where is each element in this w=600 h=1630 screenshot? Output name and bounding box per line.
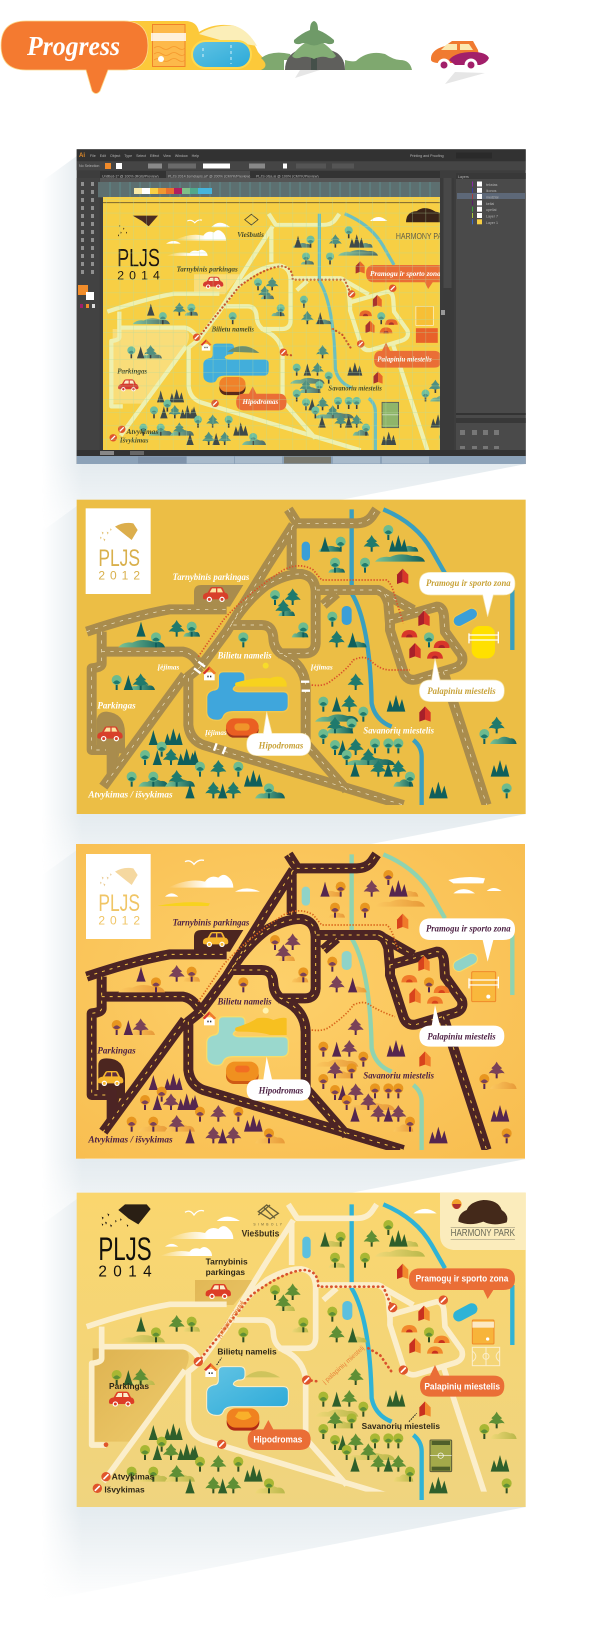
pond [302,887,479,973]
stadium [226,1062,259,1084]
trees [112,525,517,798]
menu bar: File Edit Object Type Select Effect View Window Help [90,154,199,158]
callout: sports [419,918,515,962]
camp [397,569,450,722]
lake [207,663,288,720]
map labels [117,231,441,445]
colour swatches [134,188,212,194]
map labels: Hipodromas [242,398,278,406]
callout: camp [419,1005,504,1047]
callout: camp [420,1365,504,1397]
map labels: Tarnybinis parkingas [173,572,250,582]
status bar [77,450,526,456]
icon: sports court [151,24,186,66]
cars [97,587,228,741]
callout: hippodrome: Hipodromas [258,1085,304,1095]
logo: PLJS 2012: PLJS [98,890,140,917]
house [204,1363,217,1377]
layers panel: medžiai [486,196,499,200]
roads [107,214,427,450]
map labels: Tarnybinis parkingas [173,918,250,928]
sports court [472,1320,494,1344]
tools panel [77,178,100,450]
logo: PLJS 2012: 2 0 1 2 [98,568,140,582]
menu bar: Printing and Proofing [410,154,444,158]
map labels: Savanoriu miestelis [363,1070,434,1080]
pond [302,542,479,628]
sports court [416,306,438,343]
harmony park logo [396,208,440,239]
callout: hippodrome: Hipodromas [253,1435,302,1445]
trees [127,226,451,445]
knot icon [245,214,258,225]
map labels: Tarnybinis parkingas [177,266,238,274]
icon: hills [261,53,412,70]
logo: PLJS 2014: PLJS [98,1230,152,1267]
path label: į palapinių miestelį [216,1300,247,1339]
logo: PLJS: 2 0 1 4 [117,268,160,282]
logo: PLJS 2014 [98,1204,152,1281]
right tool strip [440,178,454,450]
control bar [77,161,526,170]
icon: car [431,41,489,72]
map labels: Įėjimas [310,662,333,671]
harmony park logo: HARMONY PARK [396,232,452,241]
lake [207,1367,288,1415]
harmony park logo: HARMONY PARK [451,1228,515,1239]
logo: PLJS: PLJS [117,245,160,273]
roads [87,854,487,1150]
menu bar [77,149,526,161]
stadium [226,718,259,738]
logo: PLJS [117,216,160,282]
harmony park logo [451,1199,515,1240]
map labels: Viešbutis [237,231,264,239]
callout: sports: Pramogų ir sporto zona [416,1274,509,1284]
signs [93,1295,448,1493]
rivers [352,1204,512,1500]
heading: speech bubble [1,21,148,94]
document tabs: PLJS ofsa.ai @ 100% (CMYK/Preview) [256,174,319,178]
callout: hippodrome [247,712,311,756]
football field [382,402,399,428]
dotted path [197,266,351,356]
map labels: Tarnybinis [206,1256,248,1266]
dotted path [198,911,398,1030]
ponds [302,1237,479,1323]
callout: sports [409,1268,515,1299]
map labels: parkingas [206,1267,245,1277]
map labels: Bilietu namelis [217,650,272,660]
panel: map 2012 warm version [76,844,525,1159]
callout: sports: Pramogu ir sporto zona [426,924,511,934]
hotel label: Viešbutis [242,1229,279,1239]
camp [397,914,450,1067]
map labels: Parkingas [109,1381,149,1391]
sports zone [469,626,498,658]
logo: PLJS 2014: 2 0 1 4 [98,1264,152,1281]
map labels: Palapiniu miestelis [377,356,432,364]
stadium [219,377,245,395]
map labels: Įėjimas [204,728,227,737]
menu bar: Ai [79,153,85,159]
map labels: Atvykimas [126,428,158,436]
map labels: Savanorių miestelis [362,1421,440,1431]
icon: pool [192,41,251,68]
layers panel: Layers [458,175,469,179]
pointer lines [217,1358,417,1422]
cars [98,932,228,1086]
cars [109,1284,231,1407]
map labels [87,918,434,1144]
trees [112,870,517,1143]
logo: PLJS 2012: PLJS [98,545,140,572]
parking areas [93,1280,255,1442]
knot icon [258,1205,278,1219]
sports zone [469,972,498,1002]
rivers [318,212,396,450]
map labels: Išvykimas [104,1484,145,1494]
camp [356,261,398,384]
panel: map 2014 final version [77,1193,526,1507]
panel shadows [30,150,526,1603]
layers panel: ikonos [486,189,497,193]
callout: sports: Pramogu ir sporto zona [426,578,511,588]
callouts [236,265,459,410]
lake [203,344,269,383]
trees [112,1220,517,1493]
signs [109,284,396,442]
layers panel: tekstas [486,183,498,187]
hotel label [242,1223,283,1239]
task bar [77,456,526,464]
basketball court [472,1347,500,1366]
map labels: Bilietu namelis [217,996,272,1006]
callout: sports [419,572,515,617]
map labels: Parkingas [97,1045,136,1055]
callout: hippodrome [247,1057,311,1101]
entrance stripes [194,662,310,754]
map labels: Bilietu namelis [211,326,254,334]
map labels: Savanoriu miestelis [328,385,382,393]
panel: map 2012 flat version [77,500,526,814]
panel: illustrator screenshot [77,149,526,464]
callout: hippodrome [248,1420,311,1450]
icon: sand hill [110,21,285,70]
harmony park corner [440,1193,526,1250]
callout: camp: Palapiniu miestelis [427,686,496,696]
callout: hippodrome: Hipodromas [258,740,304,750]
roads [87,1204,487,1500]
rivers [352,509,512,805]
layers panel: upeliai [486,208,497,212]
map labels: Pramogu ir sporto zona [370,270,441,278]
clouds [160,1209,437,1256]
camp [397,1264,450,1417]
callout: camp [419,658,504,702]
map labels: Parkingas [97,700,136,710]
rivers [352,854,512,1150]
icon: pine tree [285,21,345,70]
clouds [166,217,387,256]
ruler and guides band [98,178,440,197]
stadium [227,1408,259,1431]
callout: camp: Palapinių miestelis [424,1381,500,1391]
logo: PLJS 2012 [86,854,151,939]
map labels: Atvykimas [112,1472,155,1482]
dotted path [198,566,410,685]
layers panel: Layer 7 [486,214,498,218]
soft shadows under tree and car [295,70,485,84]
document tabs [100,171,440,182]
map labels: Savanorių miestelis [363,725,434,735]
control bar: No Selection [79,164,99,168]
dotted path [198,1270,393,1382]
hotel label: SIMBOLY [253,1223,283,1227]
map labels: Bilietų namelis [217,1346,277,1356]
hill on lake [227,346,259,353]
house [201,339,211,351]
map labels: Parkingas [117,367,148,375]
map labels: Atvykimas / išvykimas [87,789,173,799]
logo: PLJS 2012 [86,508,151,594]
map labels [104,1256,440,1494]
layers panel: keliai [486,202,494,206]
layers panel [456,173,526,450]
icon: cream hill [199,26,257,46]
map labels: Išvykimas [119,437,149,445]
house [203,666,216,680]
map labels: Įėjimas [156,662,179,671]
artboard map [103,197,459,450]
football field [430,1440,452,1472]
roads [87,509,487,805]
callout: camp: Palapiniu miestelis [427,1031,496,1041]
house [203,1011,216,1025]
path label: į palapinių miestelį [322,1345,366,1386]
title: Progress [26,31,120,61]
logo: PLJS 2012: 2 0 1 2 [98,913,140,927]
parking areas [113,274,241,404]
car [118,277,223,391]
header banner [1,21,489,94]
lake [207,1008,288,1065]
map labels: Atvykimas / išvykimas [87,1134,173,1144]
map labels [87,572,434,799]
layers panel: Layer 1 [486,221,498,225]
document tabs: PLJS 2014 žemėlapis.ai* @ 200% (CMYK/Preview) [168,174,250,178]
clouds [157,860,502,906]
document tabs: Untitled-1* @ 100% (RGB/Preview) [102,174,159,178]
